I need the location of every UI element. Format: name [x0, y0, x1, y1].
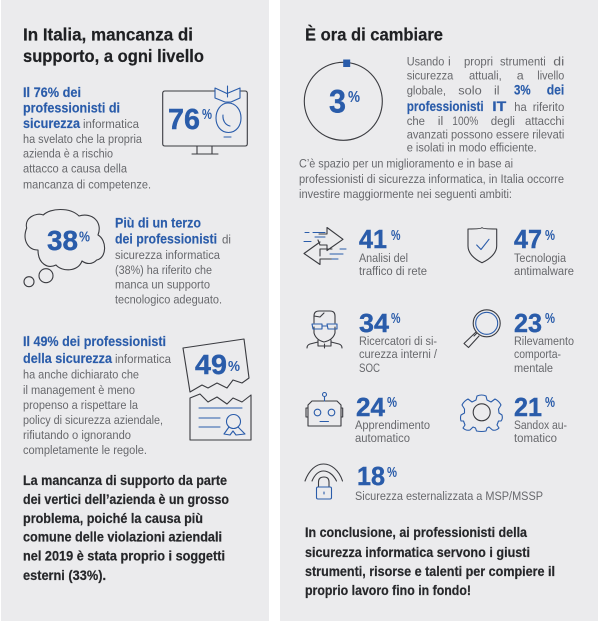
text block: 76 percent: informatica [83, 117, 139, 131]
icon: opposing arrows [304, 228, 346, 264]
text block: right conclusion: proprio lavoro fino in fondo! [305, 583, 471, 598]
text block: 3 percent, justified: degli [491, 114, 515, 128]
stat: internal researchers 34 percent: SOC [359, 361, 380, 375]
stat: automatic sandbox 21 percent [460, 392, 567, 445]
stat: behavioural detection 23 percent: mentale [514, 361, 553, 375]
text block: left conclusion: problema, poiché la causa più [23, 511, 203, 526]
icon: torn certificate, 49 percent: 49 [195, 349, 227, 380]
icon: shield with check [468, 228, 497, 263]
text block: 76 percent: ha svelato che la propria [23, 132, 142, 146]
text block: 3 percent, justified [407, 55, 564, 155]
text block: 3 percent, justified: di [553, 55, 564, 69]
text block: 76 percent [23, 85, 151, 192]
text block: introduction to areas [299, 157, 564, 201]
stat: machine learning 24 percent: Apprendimento [355, 418, 430, 432]
text block: introduction to areas: C’è spazio per un miglioramento e in base ai [299, 157, 513, 171]
stat: internal researchers 34 percent: % [391, 310, 400, 327]
stat: machine learning 24 percent: 24 [356, 392, 386, 422]
heading: right panel title: È ora di cambiare [305, 24, 443, 45]
text block: 3 percent, justified: solo [458, 84, 482, 98]
stat: automatic sandbox 21 percent: 21 [514, 392, 542, 422]
text block: 76 percent: sicurezza [23, 116, 80, 131]
stat: network traffic 41 percent: traffico di rete [359, 264, 427, 278]
text block: 3 percent, justified: i [448, 55, 451, 69]
stat: behavioural detection 23 percent: Rilevamento [514, 334, 574, 348]
text block: 49 percent: ha anche dichiarato che [23, 368, 139, 382]
heading: left panel title: supporto, a ogni livello [23, 46, 204, 66]
stat: antimalware 47 percent [468, 224, 574, 278]
chart: 3 percent ring: 3 [329, 84, 346, 120]
text block: 38 percent: Più di un terzo [115, 216, 201, 231]
text block: 3 percent, justified: professionisti [407, 99, 484, 114]
text block: 49 percent: propenso a rispettare la [23, 398, 138, 412]
text block: left conclusion [23, 473, 229, 583]
text block: 3 percent, justified: a [517, 68, 524, 82]
stat: antimalware 47 percent: antimalware [514, 264, 574, 278]
text block: 76 percent: professionisti di [23, 100, 120, 116]
text block: 76 percent: Il 76% dei [23, 85, 81, 100]
icon: torn certificate, 49 percent: % [228, 358, 240, 375]
text block: 3 percent, justified: il [438, 114, 443, 128]
stat: internal researchers 34 percent: curezza interni / [359, 347, 437, 361]
icon: thought cloud, 38 percent: % [79, 229, 90, 246]
text block: 76 percent: attacco a causa della [23, 162, 127, 176]
stat: automatic sandbox 21 percent: tomatico [514, 431, 557, 445]
stat: machine learning 24 percent: % [387, 394, 397, 411]
icon: thought cloud, 38 percent [24, 210, 105, 287]
text block: 3 percent, justified: ha [514, 100, 527, 114]
stat: outsourced security 18 percent [305, 461, 543, 503]
stat: behavioural detection 23 percent: 23 [514, 308, 542, 338]
text block: 3 percent, justified: globale, [407, 84, 446, 98]
text block: 3 percent, justified: attuali, [469, 68, 502, 82]
text block: right conclusion: sicurezza informatica servono i giusti [305, 545, 530, 560]
icon: thought cloud, 38 percent: 38 [47, 225, 78, 256]
text block: 49 percent: rifiutando o ignorando [23, 428, 131, 442]
text block: 38 percent: tecnologico adeguato. [115, 293, 222, 307]
text block: right conclusion: In conclusione, ai professionisti della [305, 525, 527, 540]
text block: 49 percent: Il 49% dei professionisti [23, 334, 166, 349]
text block: 3 percent, justified: IT [492, 99, 507, 114]
icon: person with glasses [307, 311, 342, 348]
text block: 49 percent: informatica [115, 352, 171, 366]
text block: 38 percent: manca un supporto [115, 278, 210, 292]
icon: torn certificate, 49 percent [183, 339, 251, 440]
icon: gear [460, 395, 502, 432]
icon: monitor with bomb, 76 percent: % [202, 106, 212, 123]
stat: antimalware 47 percent: Tecnologia [514, 251, 566, 265]
text block: right conclusion [305, 525, 555, 598]
stat: outsourced security 18 percent: Sicurezza esternalizzata a MSP/MSSP [355, 489, 543, 503]
text block: 3 percent, justified: il [494, 84, 500, 98]
text block: 3 percent, justified: 3% [514, 83, 531, 98]
icon: wireless padlock [305, 464, 342, 499]
stat: machine learning 24 percent [306, 392, 430, 445]
text block: left conclusion: esterni (33%). [23, 568, 106, 583]
stat: network traffic 41 percent [304, 224, 427, 278]
panel: right, time to change [280, 0, 598, 621]
stat: behavioural detection 23 percent: comporta- [514, 347, 561, 361]
text block: 49 percent: della sicurezza [23, 351, 112, 366]
stat: automatic sandbox 21 percent: % [545, 394, 555, 411]
text block: 38 percent: dei professionisti [115, 232, 217, 247]
stat: network traffic 41 percent: 41 [359, 224, 387, 254]
icon: monitor with bomb, 76 percent [163, 86, 247, 154]
text block: 76 percent: azienda è a rischio [23, 146, 113, 160]
stat: automatic sandbox 21 percent: Sandox au- [514, 418, 567, 432]
stat: antimalware 47 percent: % [545, 227, 555, 244]
heading: left panel title [23, 24, 204, 66]
text block: 76 percent: mancanza di competenze. [23, 178, 151, 192]
text block: 38 percent: (38%) ha riferito che [115, 263, 212, 277]
text block: 3 percent, justified: che [407, 114, 425, 128]
text block: right conclusion: strumenti, risorse e talenti per compiere il [305, 564, 555, 579]
text block: 49 percent: completamente le regole. [23, 443, 147, 457]
stat: internal researchers 34 percent: Ricercatori di si- [359, 334, 437, 348]
text block: 49 percent: il management è meno [23, 383, 135, 397]
text block: introduction to areas: investire maggiormente nei seguenti ambiti: [299, 187, 512, 201]
stat: behavioural detection 23 percent: % [545, 310, 555, 327]
icon: magnifying glass [464, 310, 500, 348]
text block: 3 percent, justified: attacchi [525, 114, 564, 128]
panel: left, support in Italy [1, 0, 269, 621]
text block: 49 percent: policy di sicurezza aziendale, [23, 413, 163, 427]
text block: 3 percent, justified: dei [547, 83, 564, 98]
stat: outsourced security 18 percent: % [387, 464, 397, 481]
text block: 3 percent, justified: sicurezza [407, 68, 453, 82]
text block: 3 percent, justified: avanzati possono essere rilevati [407, 127, 564, 141]
text block: 38 percent: di [222, 233, 231, 247]
text block: introduction to areas: professionisti di sicurezza informatica, in Italia occorre [299, 172, 564, 186]
text block: 38 percent: sicurezza informatica [115, 248, 220, 262]
text block: 3 percent, justified: strumenti [500, 55, 546, 69]
text block: 49 percent [23, 334, 171, 457]
heading: left panel title: In Italia, mancanza di [23, 24, 193, 44]
stat: internal researchers 34 percent: 34 [359, 308, 390, 338]
stat: machine learning 24 percent: automatico [355, 431, 410, 445]
chart: 3 percent ring: % [348, 89, 360, 106]
text block: 3 percent, justified: propri [464, 55, 493, 69]
stat: antimalware 47 percent: 47 [514, 224, 542, 254]
text block: 3 percent, justified: Usando [407, 55, 444, 69]
text block: 3 percent, justified: e isolati in modo efficiente. [407, 141, 537, 155]
stat: internal researchers 34 percent [307, 308, 437, 375]
icon: monitor with bomb, 76 percent: 76 [168, 104, 200, 136]
text block: 3 percent, justified: livello [537, 68, 564, 82]
text block: left conclusion: La mancanza di supporto da parte [23, 473, 227, 488]
stat: outsourced security 18 percent: 18 [357, 461, 385, 491]
stat: behavioural detection 23 percent [464, 308, 574, 375]
text block: 38 percent [115, 216, 231, 307]
text block: left conclusion: dei vertici dell’azienda è un grosso [23, 492, 229, 507]
text block: left conclusion: comune delle violazioni aziendali [23, 530, 222, 545]
icon: robot head [306, 392, 343, 426]
stat: network traffic 41 percent: % [391, 227, 400, 244]
chart: 3 percent ring [304, 60, 382, 140]
stat: network traffic 41 percent: Analisi del [359, 251, 408, 265]
text block: left conclusion: nel 2019 è stata proprio i soggetti [23, 549, 225, 564]
text block: 3 percent, justified: 100% [452, 114, 478, 128]
text block: 3 percent, justified: riferito [533, 100, 564, 114]
